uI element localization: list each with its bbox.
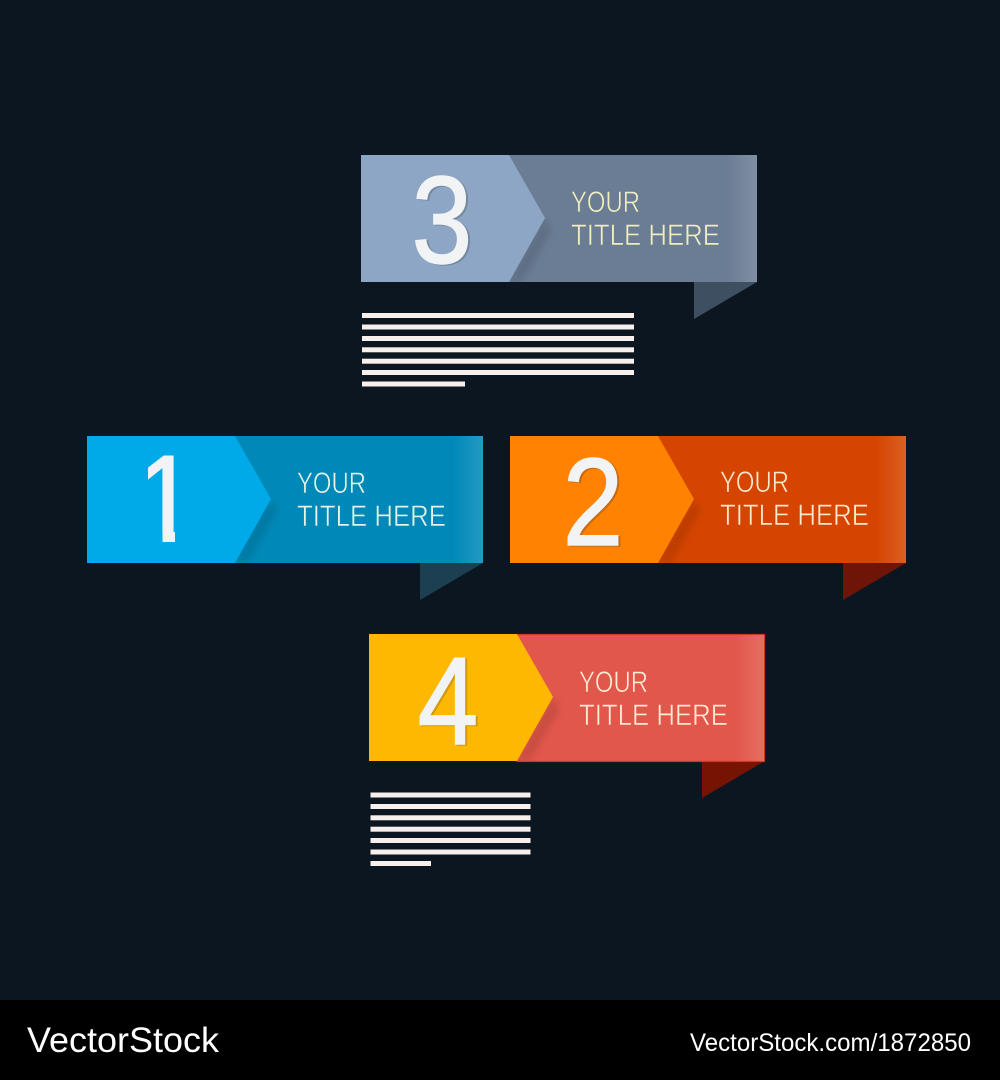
title panel bbox=[658, 436, 906, 563]
title text: YOUR bbox=[297, 467, 366, 500]
number arrow bbox=[87, 436, 271, 563]
footer id: VectorStock.com/1872850 bbox=[690, 1029, 971, 1057]
banner 4 bbox=[369, 631, 765, 798]
number 1: 1 bbox=[135, 430, 197, 568]
ribbon tail bbox=[694, 282, 757, 319]
banner 2: 2 bbox=[563, 432, 623, 572]
number arrow bbox=[369, 634, 553, 761]
number arrow bbox=[510, 436, 694, 563]
banner 1 bbox=[87, 430, 483, 600]
ribbon tail bbox=[843, 563, 906, 600]
number arrow bbox=[361, 155, 545, 282]
banner 2 bbox=[510, 432, 906, 600]
title panel bbox=[517, 634, 764, 762]
banner 1: TITLE HERE bbox=[297, 500, 446, 533]
title text: YOUR bbox=[720, 466, 789, 499]
title text: YOUR bbox=[571, 186, 640, 219]
ribbon tail bbox=[420, 563, 483, 600]
title panel bbox=[509, 155, 757, 282]
number 2: 2 bbox=[565, 433, 625, 573]
banner 4: TITLE HERE bbox=[579, 699, 728, 732]
title text: YOUR bbox=[579, 666, 648, 699]
banner 2: TITLE HERE bbox=[720, 499, 869, 532]
number 4: 4 bbox=[420, 632, 480, 772]
banner 3: TITLE HERE bbox=[571, 219, 720, 252]
title panel bbox=[235, 436, 483, 563]
ribbon tail bbox=[702, 761, 765, 798]
banner 3 bbox=[361, 150, 757, 319]
text placeholder lines 3 bbox=[362, 313, 634, 386]
banner 4: 4 bbox=[418, 631, 478, 771]
footer bar bbox=[0, 1000, 1000, 1080]
text placeholder lines 4 bbox=[370, 792, 530, 866]
number 3: 3 bbox=[414, 151, 474, 291]
footer logo: VectorStock bbox=[27, 1021, 220, 1060]
banner 3: 3 bbox=[412, 150, 472, 290]
